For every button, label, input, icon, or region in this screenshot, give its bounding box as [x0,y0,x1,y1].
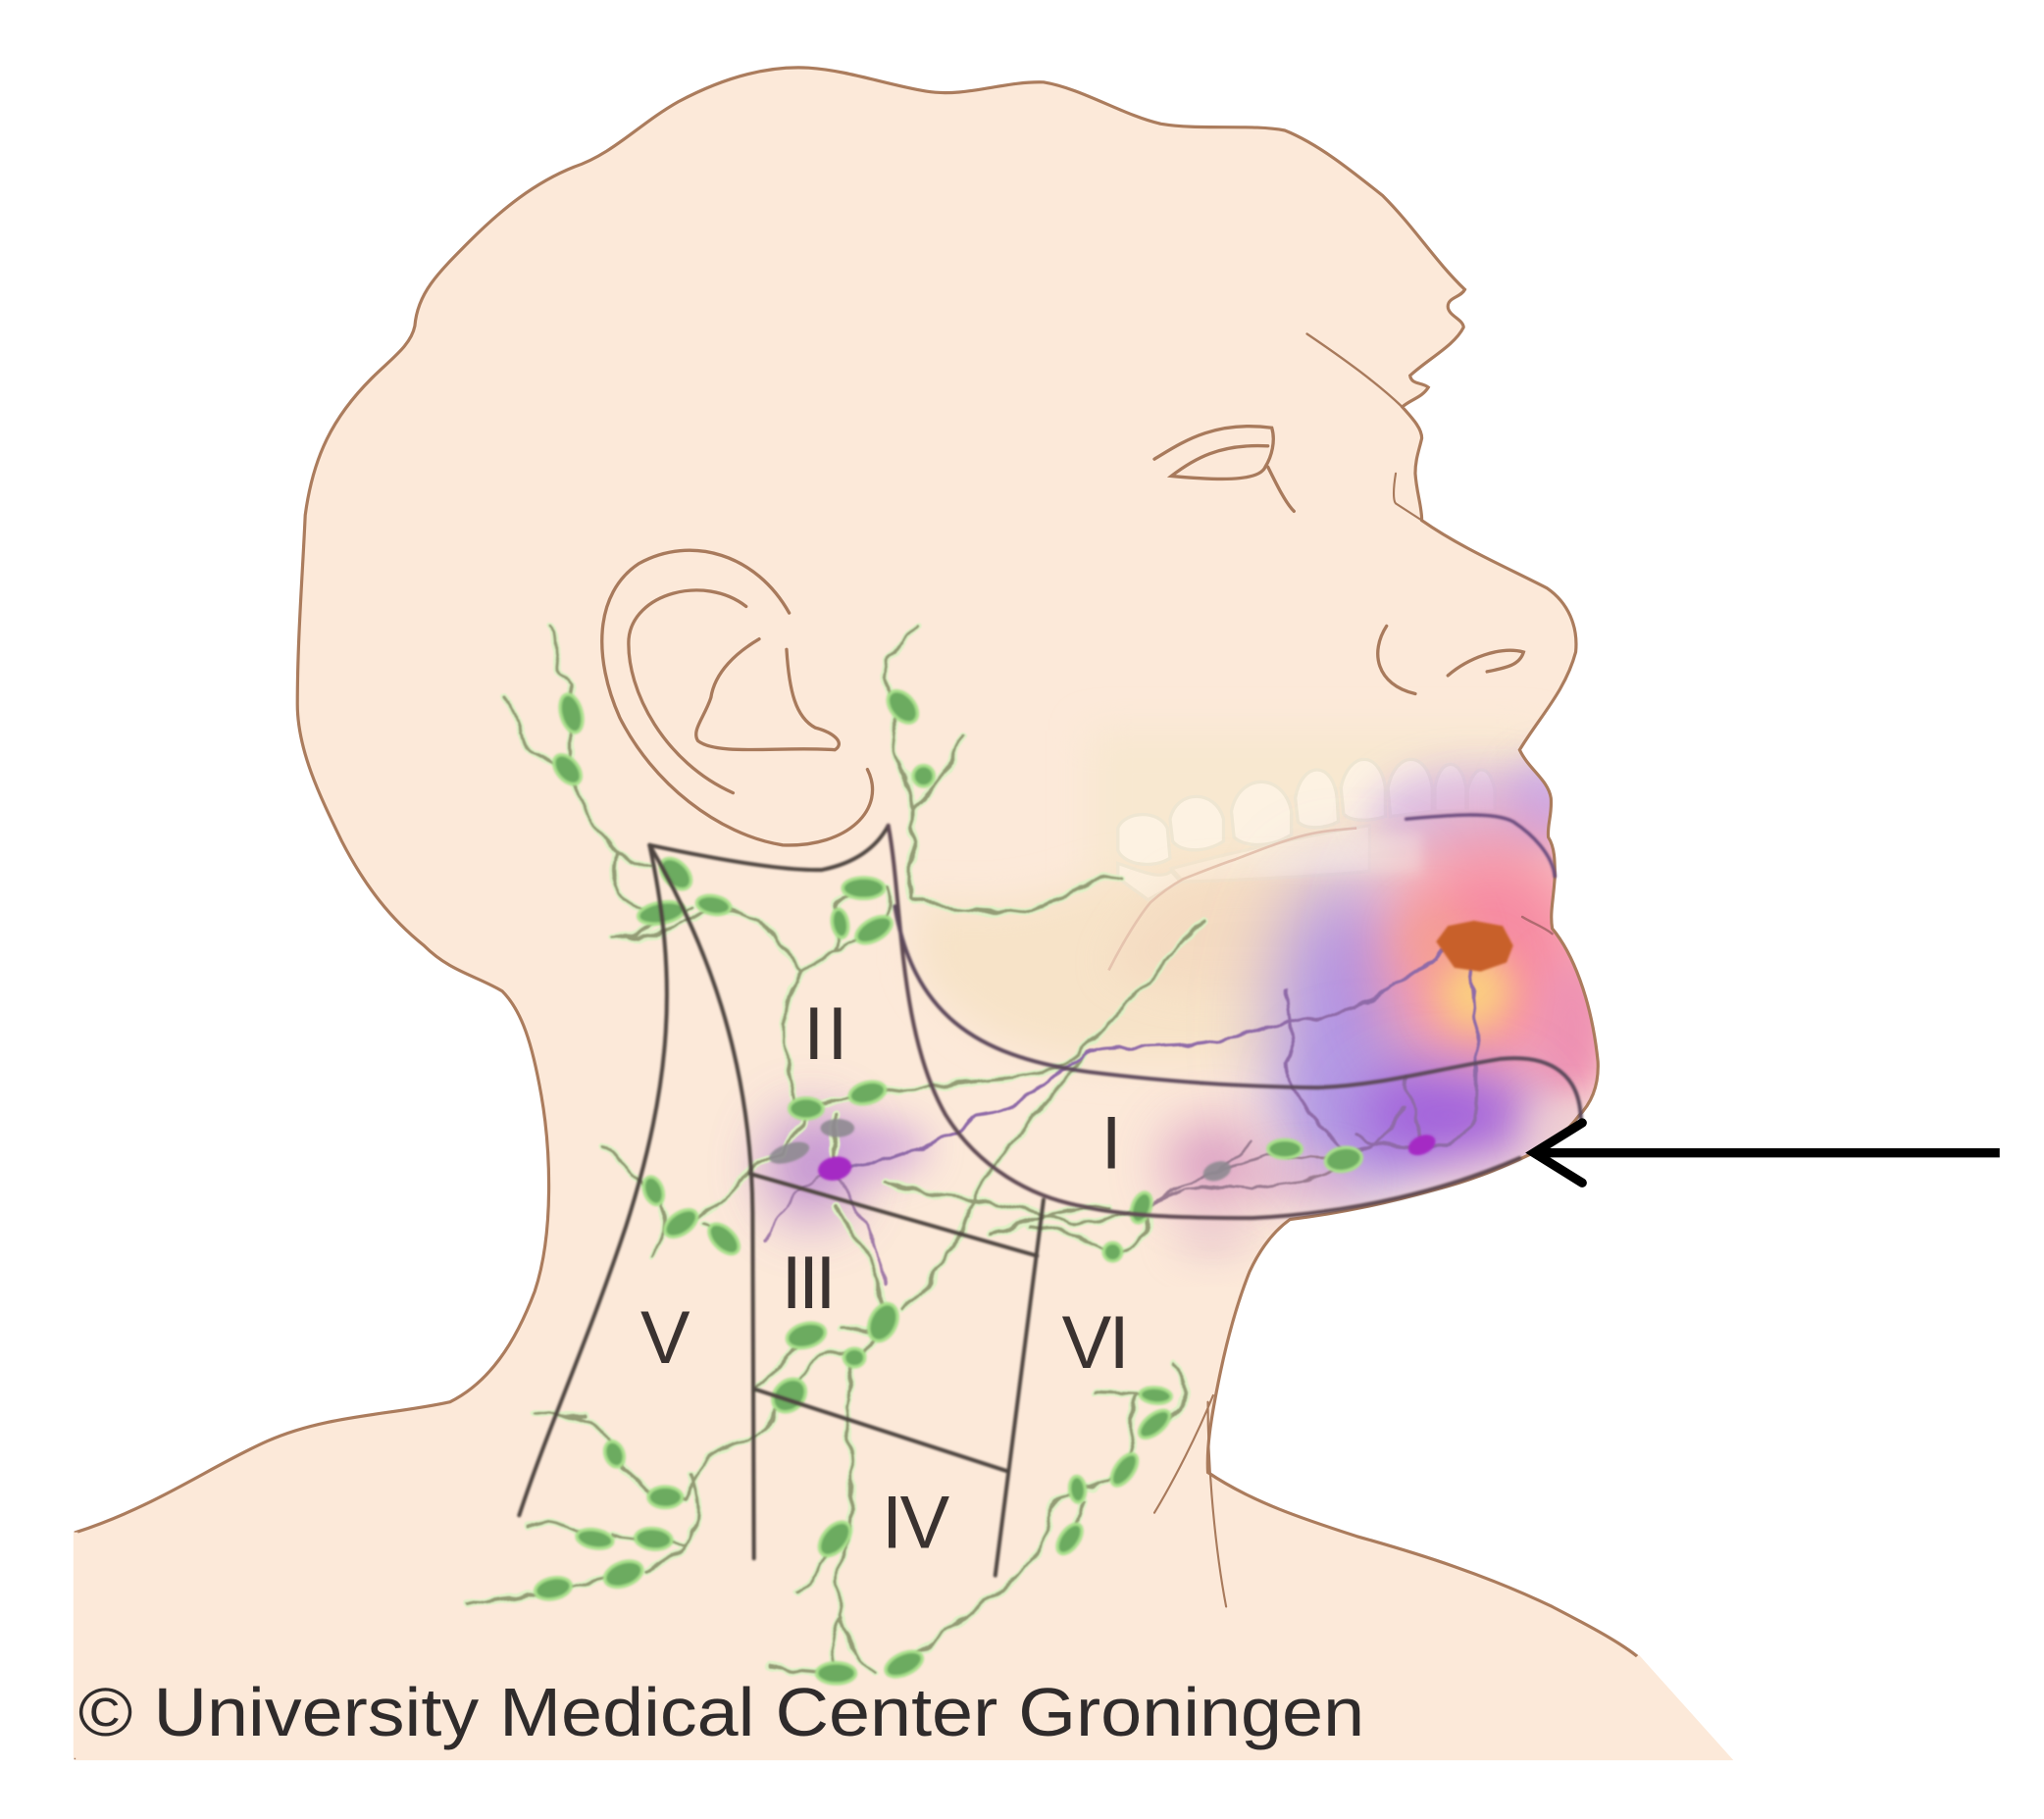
affected purple nodes [816,1131,1439,1184]
jaw bone shading [919,753,1406,1064]
copyright text: © University Medical Center Groningen [78,1674,1364,1750]
teeth [1118,759,1495,900]
facial features [602,333,1553,1606]
forehead line [1307,333,1403,407]
eye [1154,427,1294,511]
lymph vessels [467,626,1477,1676]
affected grey nodes [766,1119,1234,1185]
ear [602,550,873,845]
head and shoulders silhouette [76,68,1728,1758]
level labels [640,992,1130,1565]
label III: III [782,1241,836,1325]
skin outline [76,68,1728,1758]
neck muscle line [1154,1395,1226,1606]
nose [1378,626,1523,694]
cheek line [1394,474,1422,521]
tumour spread colour glow [767,756,1610,1257]
label I: I [1101,1102,1122,1186]
label IV: IV [882,1482,950,1565]
label VI: VI [1062,1301,1130,1385]
label V: V [640,1296,690,1380]
tumour [1436,921,1513,972]
neck level boundary lines [519,815,1581,1576]
lip line [1522,917,1553,934]
label II: II [803,992,847,1076]
lower gum interior [1107,827,1357,971]
arrow pointing at tumour [1534,1123,2000,1183]
lymph nodes [533,685,1439,1684]
